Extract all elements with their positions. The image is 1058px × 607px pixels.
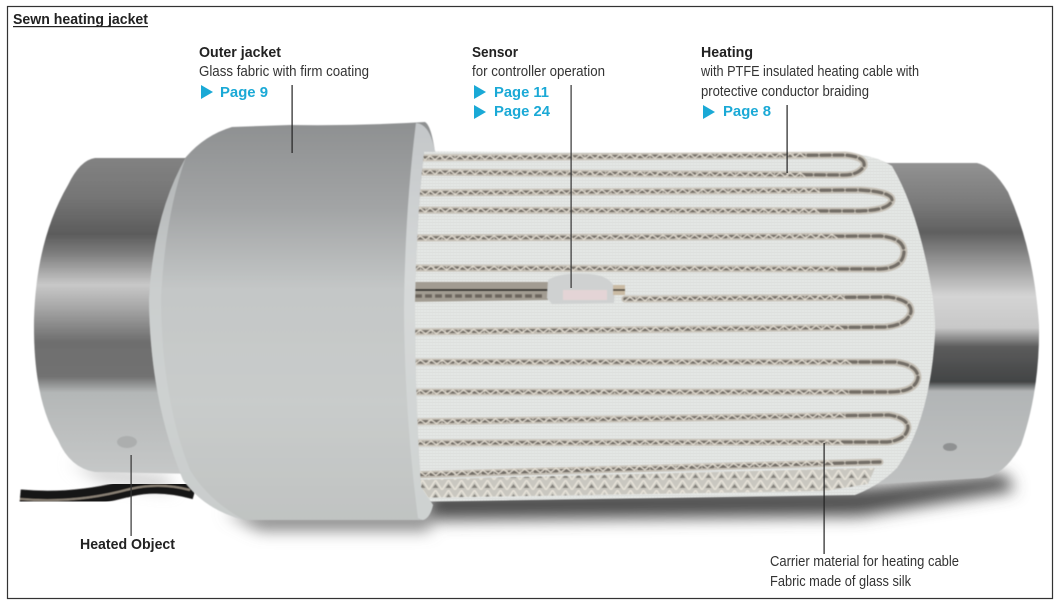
lower mesh of cable: [405, 468, 875, 498]
callout: sensor: for controller operation: [472, 63, 605, 80]
jacket rim: [404, 123, 435, 520]
callout: heated object: [80, 455, 175, 553]
left pipe: [34, 158, 200, 474]
pipe mounting hole: [117, 436, 137, 448]
jacket left fold: [149, 157, 244, 520]
cable dark braid: [405, 155, 918, 475]
callout: sensor: [472, 44, 605, 288]
callout: sensor: Page 11: [494, 84, 549, 101]
photo: heating jacket on pipe: [20, 122, 1039, 530]
callout: heated object: Heated Object: [80, 536, 175, 553]
callout: carrier material: [770, 443, 959, 590]
callout: outer jacket: Page 9: [220, 84, 268, 101]
callout: carrier material: Carrier material for heating cable: [770, 553, 959, 570]
cable base band: [405, 155, 918, 475]
ground shadow: [70, 462, 1015, 530]
carrier fabric of glass silk: [405, 151, 935, 502]
callout: outer jacket: Glass fabric with firm coating: [199, 63, 369, 80]
sensor lead: [405, 282, 548, 302]
zigzag stitching: [405, 153, 851, 476]
callout: heating: with PTFE insulated heating cable with: [700, 63, 919, 80]
right pipe: [860, 163, 1039, 485]
power cable: [20, 485, 195, 500]
sensor patch: [547, 274, 615, 304]
sensor: [405, 274, 625, 304]
callout: outer jacket: [199, 44, 369, 153]
callout: sensor: Sensor: [472, 44, 518, 61]
outer jacket: [149, 122, 435, 520]
callout: outer jacket: Outer jacket: [199, 44, 281, 61]
callout: heating: [700, 44, 919, 173]
callout: carrier material: Fabric made of glass silk: [770, 573, 911, 590]
heating cable loops: [405, 153, 918, 476]
title: Sewn heating jacket: [13, 11, 148, 28]
callout: sensor: Page 24: [494, 103, 551, 120]
callout: heating: protective conductor braiding: [701, 83, 869, 100]
callout: heating: Heating: [701, 44, 753, 61]
callout: heating: Page 8: [723, 103, 771, 120]
